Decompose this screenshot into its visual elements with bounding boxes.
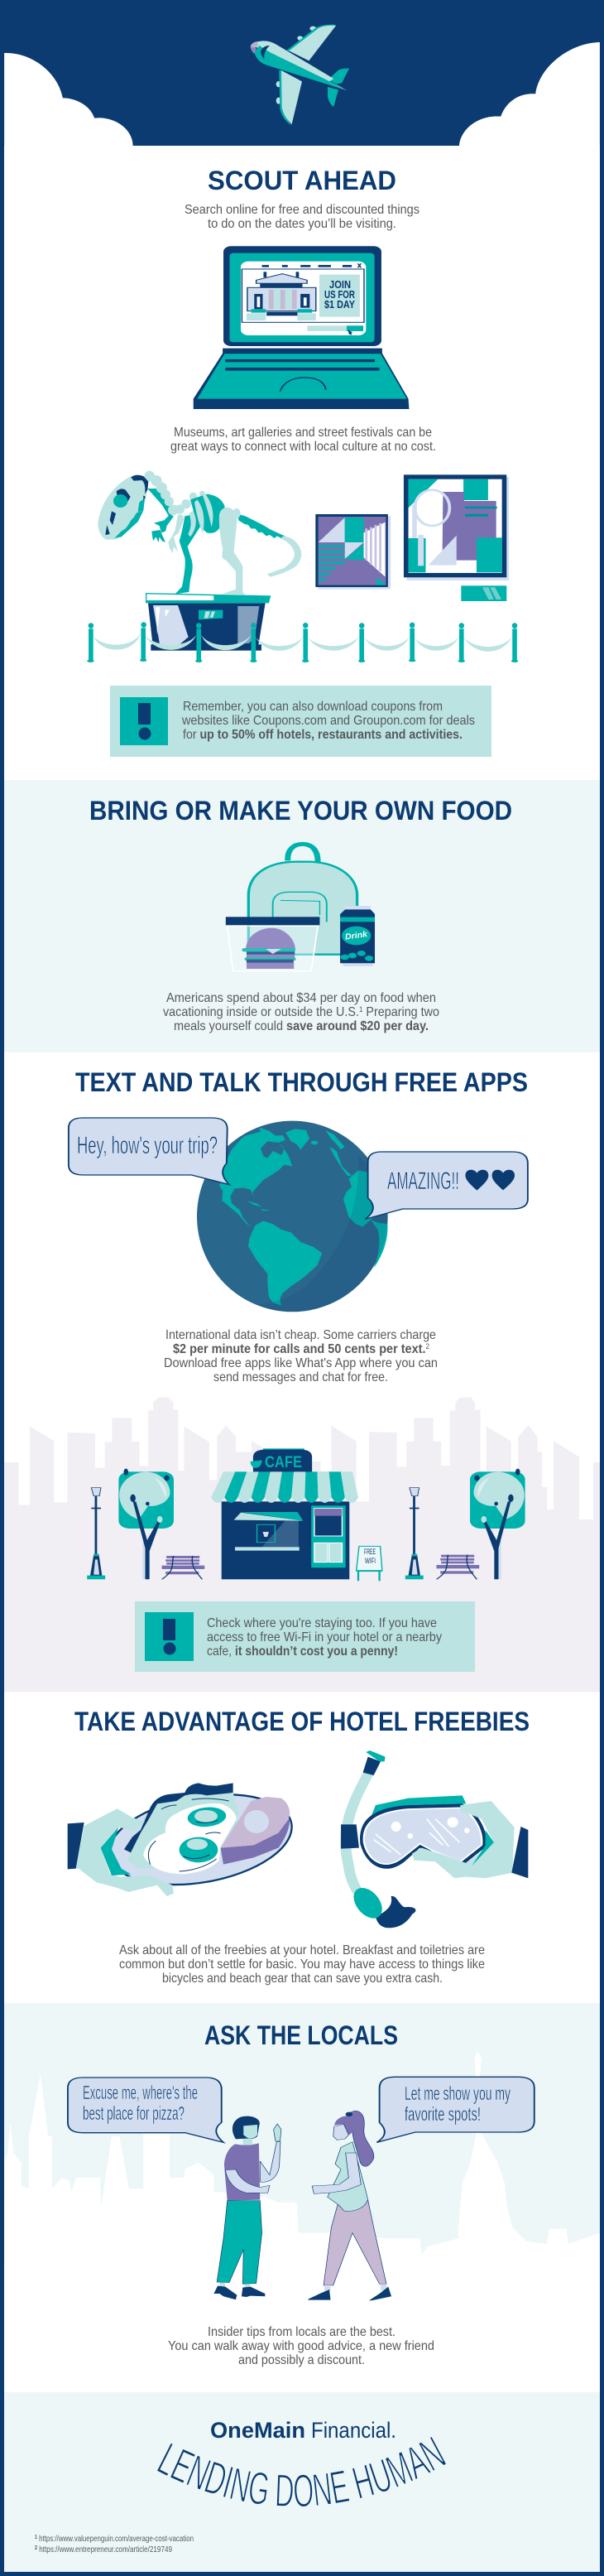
icon: snorkel mask — [341, 1750, 528, 1928]
icon: cafe — [211, 1448, 358, 1579]
text block: wifi text: cafe, it shouldn’t cost you a penny! — [207, 1644, 398, 1659]
callout: amazing bubble — [365, 1152, 528, 1219]
heading: food: BRING OR MAKE YOUR OWN FOOD — [89, 796, 512, 826]
icon: left cloud — [4, 53, 133, 146]
text block: wifi text: access to free Wi-Fi in your hotel or a nearby — [207, 1630, 442, 1644]
text block: food text: meals yourself could save around $20 per day. — [174, 1019, 429, 1033]
icon: pedestal — [146, 593, 271, 651]
icon: dinosaur skeleton — [98, 471, 301, 595]
icon: hearts — [465, 1170, 515, 1191]
text block: coupons text — [181, 700, 475, 742]
text block: coupons text: websites like Coupons.com and Groupon.com for deals — [181, 714, 475, 728]
footnotes: https://www.entrepreneur.com/article/219749 — [37, 2545, 172, 2554]
panel: scout ahead — [170, 166, 436, 454]
logo: onemain financial: OneMain — [210, 2418, 305, 2443]
text: free wifi: WIFI — [365, 1557, 376, 1565]
icon: right tree — [470, 1469, 525, 1579]
text block: apps text: $2 per minute for calls and 50 cents per text. — [173, 1342, 453, 1356]
panel: footer — [4, 2392, 600, 2572]
heading: apps: TEXT AND TALK THROUGH FREE APPS — [75, 1067, 528, 1097]
icon: right bench — [437, 1555, 479, 1579]
panel: ask the locals — [4, 2003, 600, 2367]
callout: spots bubble — [376, 2077, 534, 2142]
tagline: lending done human — [157, 2437, 446, 2506]
icon: left lamp post — [87, 1488, 105, 1579]
text: join us: JOIN — [329, 279, 351, 291]
icon: burger — [242, 928, 296, 969]
text: free wifi: FREE — [364, 1548, 376, 1556]
icon: exclamation — [145, 1612, 194, 1661]
icon: exclamation — [120, 697, 168, 745]
icon: ropes and stanchions — [87, 622, 518, 662]
text block: locals text — [168, 2325, 434, 2367]
illustration: paintings and ropes — [87, 474, 518, 662]
text block: apps text: 2 — [425, 1342, 429, 1351]
footnotes: https://www.valuepenguin.com/average-cost-vacation — [37, 2534, 194, 2544]
text block: locals text: and possibly a discount. — [238, 2353, 365, 2367]
icon: left hand — [68, 1808, 174, 1896]
text block: food text: vacationing inside or outside the U.S. — [163, 1005, 381, 1019]
icon: left tree — [118, 1469, 174, 1579]
text block: search online — [185, 203, 419, 231]
text block: apps text: Download free apps like What's App where you can — [164, 1356, 438, 1370]
footnotes: 1 — [35, 2535, 37, 2540]
text block: food text: 1 — [359, 1005, 362, 1014]
icon: left bench — [162, 1556, 204, 1579]
text: free wifi — [364, 1548, 376, 1565]
logo: onemain financial: Financial. — [311, 2418, 396, 2443]
text block: hotel text: Ask about all of the freebies at your hotel. Breakfast and toiletries are — [119, 1943, 485, 1957]
illustration: city street with cafe — [4, 1398, 600, 1692]
text block: food text: Preparing two — [362, 1005, 439, 1019]
icon: backpack, burger and drink can — [226, 844, 375, 971]
icon: breakfast plate — [68, 1781, 299, 1898]
icon: small painting — [315, 514, 391, 590]
panel: hotel freebies — [68, 1707, 530, 1986]
callout: spots bubble: favorite spots! — [405, 2103, 481, 2125]
icon: museum — [247, 272, 316, 320]
icon: woman — [308, 2111, 391, 2300]
icon: can — [340, 906, 375, 966]
text block: coupons text: for up to 50% off hotels, restaurants and activities. — [183, 728, 463, 742]
text block: apps text: send messages and chat for free. — [213, 1370, 388, 1384]
text block: hotel text: common but don’t settle for basic. You may have access to things like — [119, 1957, 485, 1972]
icon: large painting — [404, 474, 509, 601]
callout: spots bubble: Let me show you my — [405, 2082, 511, 2104]
text: join us — [324, 279, 356, 311]
callout: wifi — [135, 1601, 475, 1672]
text block: museums: great ways to connect with local culture at no cost. — [170, 440, 436, 454]
text block: coupons text: Remember, you can also download coupons from — [183, 700, 443, 714]
skyline background — [4, 2051, 600, 2271]
icon: laptop — [194, 246, 409, 409]
text block: wifi text — [207, 1616, 442, 1659]
panel: bring or make your own food — [4, 780, 600, 1052]
text block: museums: Museums, art galleries and street festivals can be — [174, 426, 432, 440]
text block: locals text: You can walk away with good advice, a new friend — [168, 2339, 434, 2353]
callout: hey bubble: Hey, how's your trip? — [77, 1132, 218, 1159]
text block: wifi text: Check where you're staying too. If you have — [207, 1616, 437, 1630]
text block: apps text: International data isn’t cheap. Some carriers charge — [165, 1328, 436, 1342]
icon: right cloud — [459, 42, 600, 146]
text block: locals text: Insider tips from locals are the best. — [208, 2325, 395, 2339]
footnotes: 2 — [35, 2545, 37, 2551]
text: join us: $1 DAY — [324, 299, 356, 311]
text: join us: US FOR — [324, 289, 355, 301]
heading: scout ahead: SCOUT AHEAD — [208, 166, 396, 195]
callout: pizza bubble — [68, 2078, 223, 2142]
tagline: lending done human: LENDING DONE HUMAN — [157, 2437, 446, 2506]
skyline background — [4, 1398, 600, 1692]
callout: pizza bubble: best place for pizza? — [83, 2102, 185, 2124]
text: drink: Drink — [344, 930, 368, 942]
text block: hotel text: bicycles and beach gear that can save you extra cash. — [162, 1972, 443, 1986]
footnotes — [35, 2534, 194, 2554]
heading: locals: ASK THE LOCALS — [204, 2020, 398, 2050]
callout: hey bubble — [69, 1118, 229, 1185]
text block: food text: Americans spend about $34 per day on food when — [166, 991, 436, 1005]
icon: right hand — [412, 1801, 528, 1878]
callout: amazing bubble: AMAZING!! — [387, 1168, 459, 1195]
text block: apps text — [164, 1328, 438, 1384]
icon: right lamp post — [405, 1488, 424, 1579]
callout: coupons — [110, 686, 491, 757]
text block: search online: to do on the dates you’ll be visiting. — [208, 217, 396, 231]
callout: pizza bubble: Excuse me, where's the — [83, 2082, 198, 2103]
text block: food text — [163, 991, 439, 1033]
text: cafe sign: CAFE — [265, 1454, 302, 1471]
icon: globe — [197, 1121, 388, 1312]
logo: onemain financial — [210, 2418, 396, 2443]
text block: search online: Search online for free and discounted things — [185, 203, 419, 217]
text block: museums — [170, 426, 436, 454]
icon: man — [213, 2116, 281, 2299]
text block: hotel text — [119, 1943, 485, 1986]
panel: sky header — [0, 0, 604, 146]
panel: text and talk — [69, 1067, 528, 1384]
icon: airplane — [251, 25, 349, 126]
icon: wifi sign — [357, 1546, 382, 1581]
heading: hotel: TAKE ADVANTAGE OF HOTEL FREEBIES — [74, 1707, 530, 1736]
